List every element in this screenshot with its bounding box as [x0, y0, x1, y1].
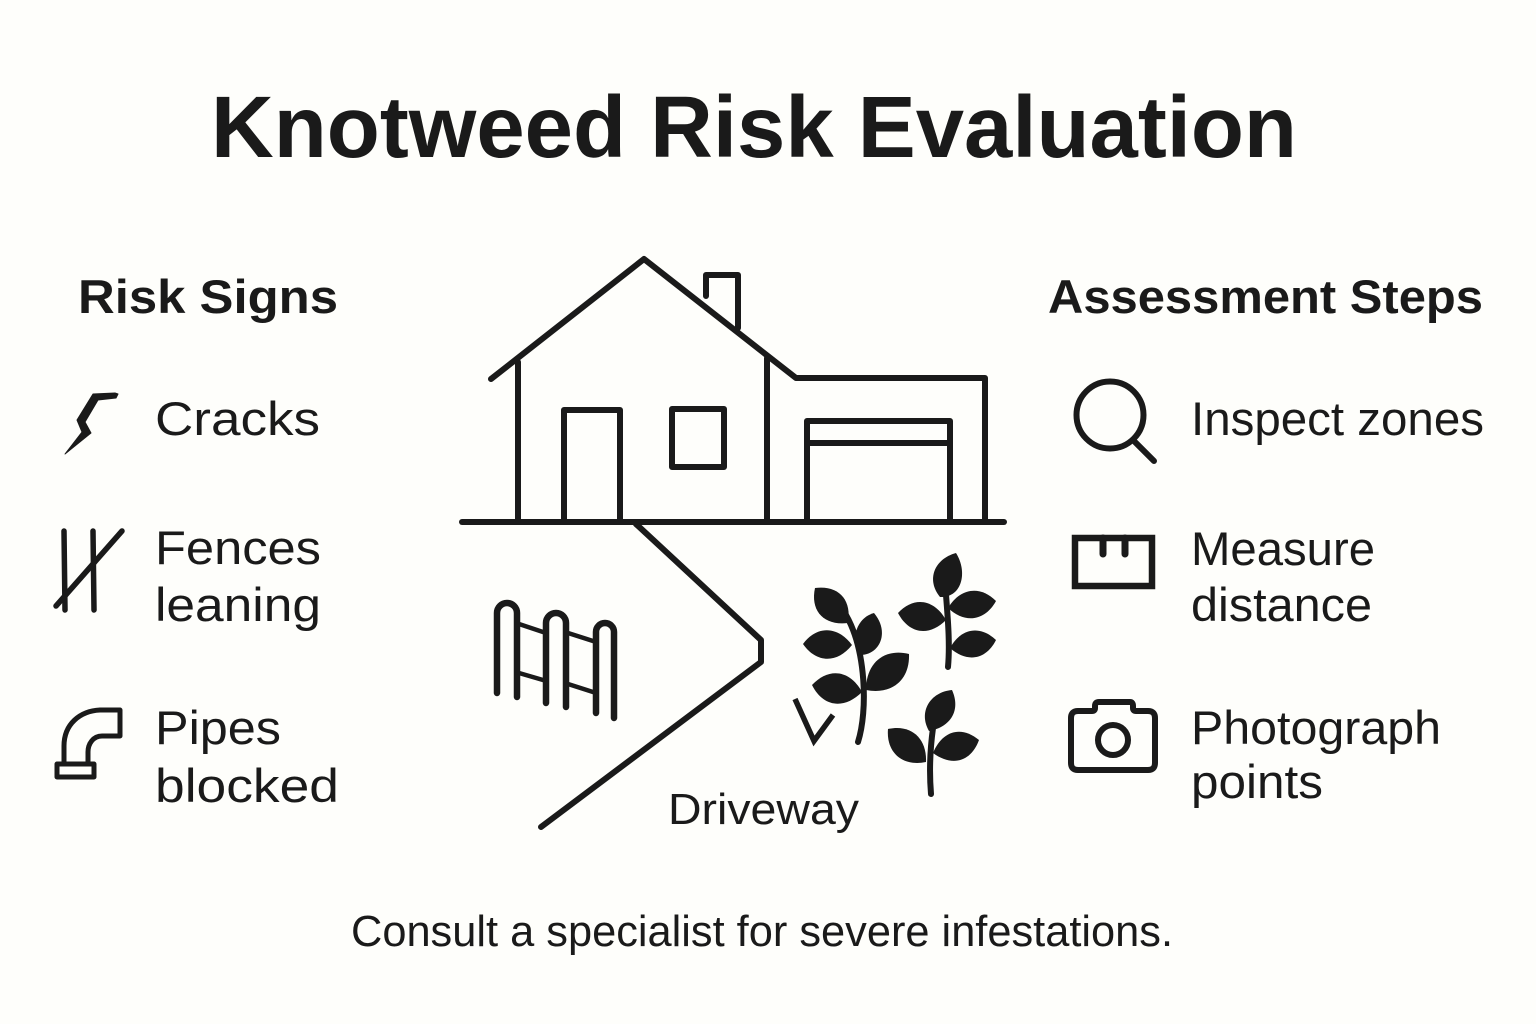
label: fences leaning — [155, 521, 321, 631]
label: measure distance — [1191, 522, 1375, 631]
footer note: Consult a specialist for severe infestations. — [351, 907, 1173, 956]
driveway label: Driveway — [668, 785, 859, 834]
label: pipes blocked: blocked — [155, 759, 339, 812]
check mark — [795, 699, 833, 741]
label: photograph points — [1191, 701, 1441, 808]
label: pipes blocked — [155, 701, 339, 812]
label: cracks: Cracks — [155, 392, 320, 445]
heading: assessment steps: Assessment Steps — [1048, 270, 1483, 323]
panel: risk signs — [56, 270, 339, 812]
label: measure distance: distance — [1191, 578, 1372, 631]
illustration: house and yard — [462, 259, 1004, 834]
label: fences leaning: leaning — [155, 578, 321, 631]
heading: risk signs: Risk Signs — [78, 270, 338, 323]
icon: pipe — [57, 710, 120, 777]
knotweed plant 2 — [898, 553, 996, 667]
label: pipes blocked: Pipes — [155, 701, 281, 754]
icon: ruler — [1075, 538, 1152, 586]
fence — [497, 603, 614, 718]
driveway — [541, 524, 761, 827]
knotweed plant 3 — [888, 690, 979, 794]
knotweed plant 1 — [803, 588, 909, 742]
house — [462, 259, 1004, 522]
icon: camera — [1071, 702, 1155, 770]
label: photograph points: points — [1191, 755, 1323, 808]
label: fences leaning: Fences — [155, 521, 321, 574]
icon: leaning fence — [56, 531, 122, 610]
title: Knotweed Risk Evaluation — [211, 79, 1297, 176]
label: measure distance: Measure — [1191, 522, 1375, 575]
icon: magnifier — [1076, 382, 1154, 461]
label: photograph points: Photograph — [1191, 701, 1441, 754]
panel: assessment steps — [1048, 270, 1484, 808]
icon: crack — [65, 393, 118, 454]
label: inspect zones: Inspect zones — [1191, 392, 1484, 445]
